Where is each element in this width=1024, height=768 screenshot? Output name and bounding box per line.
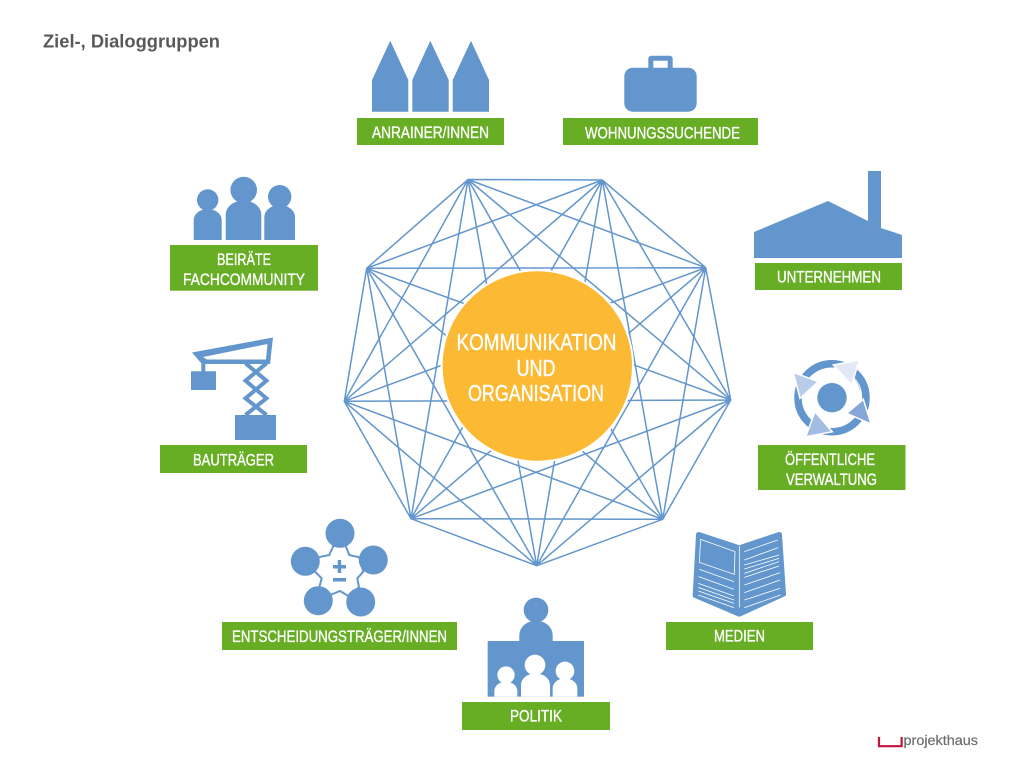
logo: projekthaus: projekthaus xyxy=(904,733,978,748)
label: Politik xyxy=(462,702,610,730)
central circle: Kommunikation und Organisation: UND xyxy=(516,355,556,381)
icon: factory xyxy=(754,171,902,258)
network diagram: nine connected nodes xyxy=(344,180,731,566)
central circle: Kommunikation und Organisation: KOMMUNIKATION xyxy=(456,329,616,355)
label: Bauträger xyxy=(160,445,307,473)
label: Medien xyxy=(666,622,813,650)
label: Bauträger: BAUTRÄGER xyxy=(193,452,274,470)
icon: cycle with four arrows xyxy=(793,360,871,437)
label: Öffentliche Verwaltung: VERWALTUNG xyxy=(786,471,877,489)
icon: briefcase xyxy=(624,56,697,112)
label: Beiräte Fachcommunity: BEIRÄTE xyxy=(217,251,271,269)
label: Öffentliche Verwaltung xyxy=(758,445,906,490)
icon: group of three people xyxy=(194,177,295,240)
label: Anrainer/innen: ANRAINER/INNEN xyxy=(372,124,489,142)
label: Wohnungssuchende xyxy=(563,118,758,145)
icon: houses xyxy=(372,41,489,112)
label: Entscheidungsträger/innen xyxy=(222,622,457,650)
label: Beiräte Fachcommunity: FACHCOMMUNITY xyxy=(183,271,305,289)
icon: speaker and audience xyxy=(488,598,584,697)
icon: five decision circles xyxy=(291,519,388,616)
icon: open newspaper xyxy=(695,535,783,614)
label: Medien: MEDIEN xyxy=(714,628,765,646)
label: Politik: POLITIK xyxy=(510,708,562,726)
label: Anrainer/innen xyxy=(357,118,504,145)
label: Unternehmen xyxy=(755,263,902,290)
central circle: Kommunikation und Organisation: ORGANISATION xyxy=(468,380,604,406)
label: Unternehmen: UNTERNEHMEN xyxy=(777,268,881,286)
label: Entscheidungsträger/innen: ENTSCHEIDUNGSTRÄGER/INNEN xyxy=(232,628,447,646)
label: Beiräte Fachcommunity xyxy=(170,245,318,291)
label: Wohnungssuchende: WOHNUNGSSUCHENDE xyxy=(585,124,740,142)
icon: crane xyxy=(191,338,276,440)
central circle: Kommunikation und Organisation xyxy=(443,271,632,461)
title: Ziel-, Dialoggruppen xyxy=(43,32,220,52)
label: Öffentliche Verwaltung: ÖFFENTLICHE xyxy=(785,451,875,469)
